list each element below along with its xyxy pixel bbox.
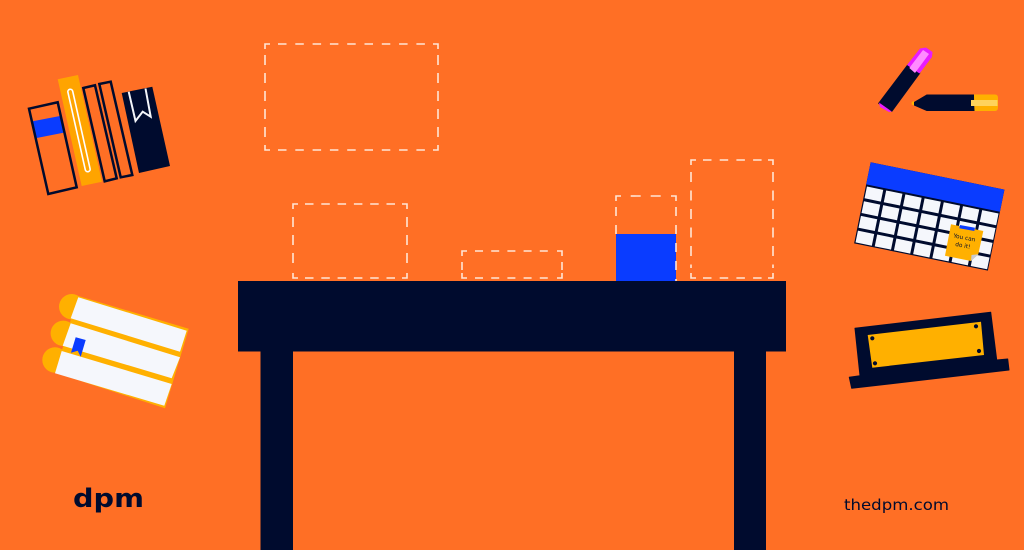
sticky note text: do it!: [955, 242, 971, 251]
dashed frame: left on desk: [293, 204, 407, 278]
icon: yellow highlighter: [912, 94, 998, 111]
icon: nameplate: [849, 312, 1009, 388]
dashed frame: tall right on desk: [691, 160, 773, 278]
logo: dpm: [73, 484, 144, 514]
dashed frame: top wall frame: [265, 44, 438, 150]
desk: [238, 281, 786, 550]
glass with blue fill: [616, 196, 676, 281]
icon: pink highlighter: [879, 48, 932, 112]
icon: bookmark: [71, 337, 86, 357]
calendar cells: [856, 187, 999, 269]
calendar header: [866, 162, 1004, 212]
icon: calendar: [854, 162, 1004, 271]
sticky note: [945, 224, 983, 261]
icon: books upright: [29, 75, 170, 194]
dashed frame: flat middle on desk: [462, 251, 562, 278]
website url: thedpm.com: [844, 496, 949, 514]
sticky note text: You can: [953, 233, 976, 244]
icon: stacked books: [42, 294, 189, 408]
